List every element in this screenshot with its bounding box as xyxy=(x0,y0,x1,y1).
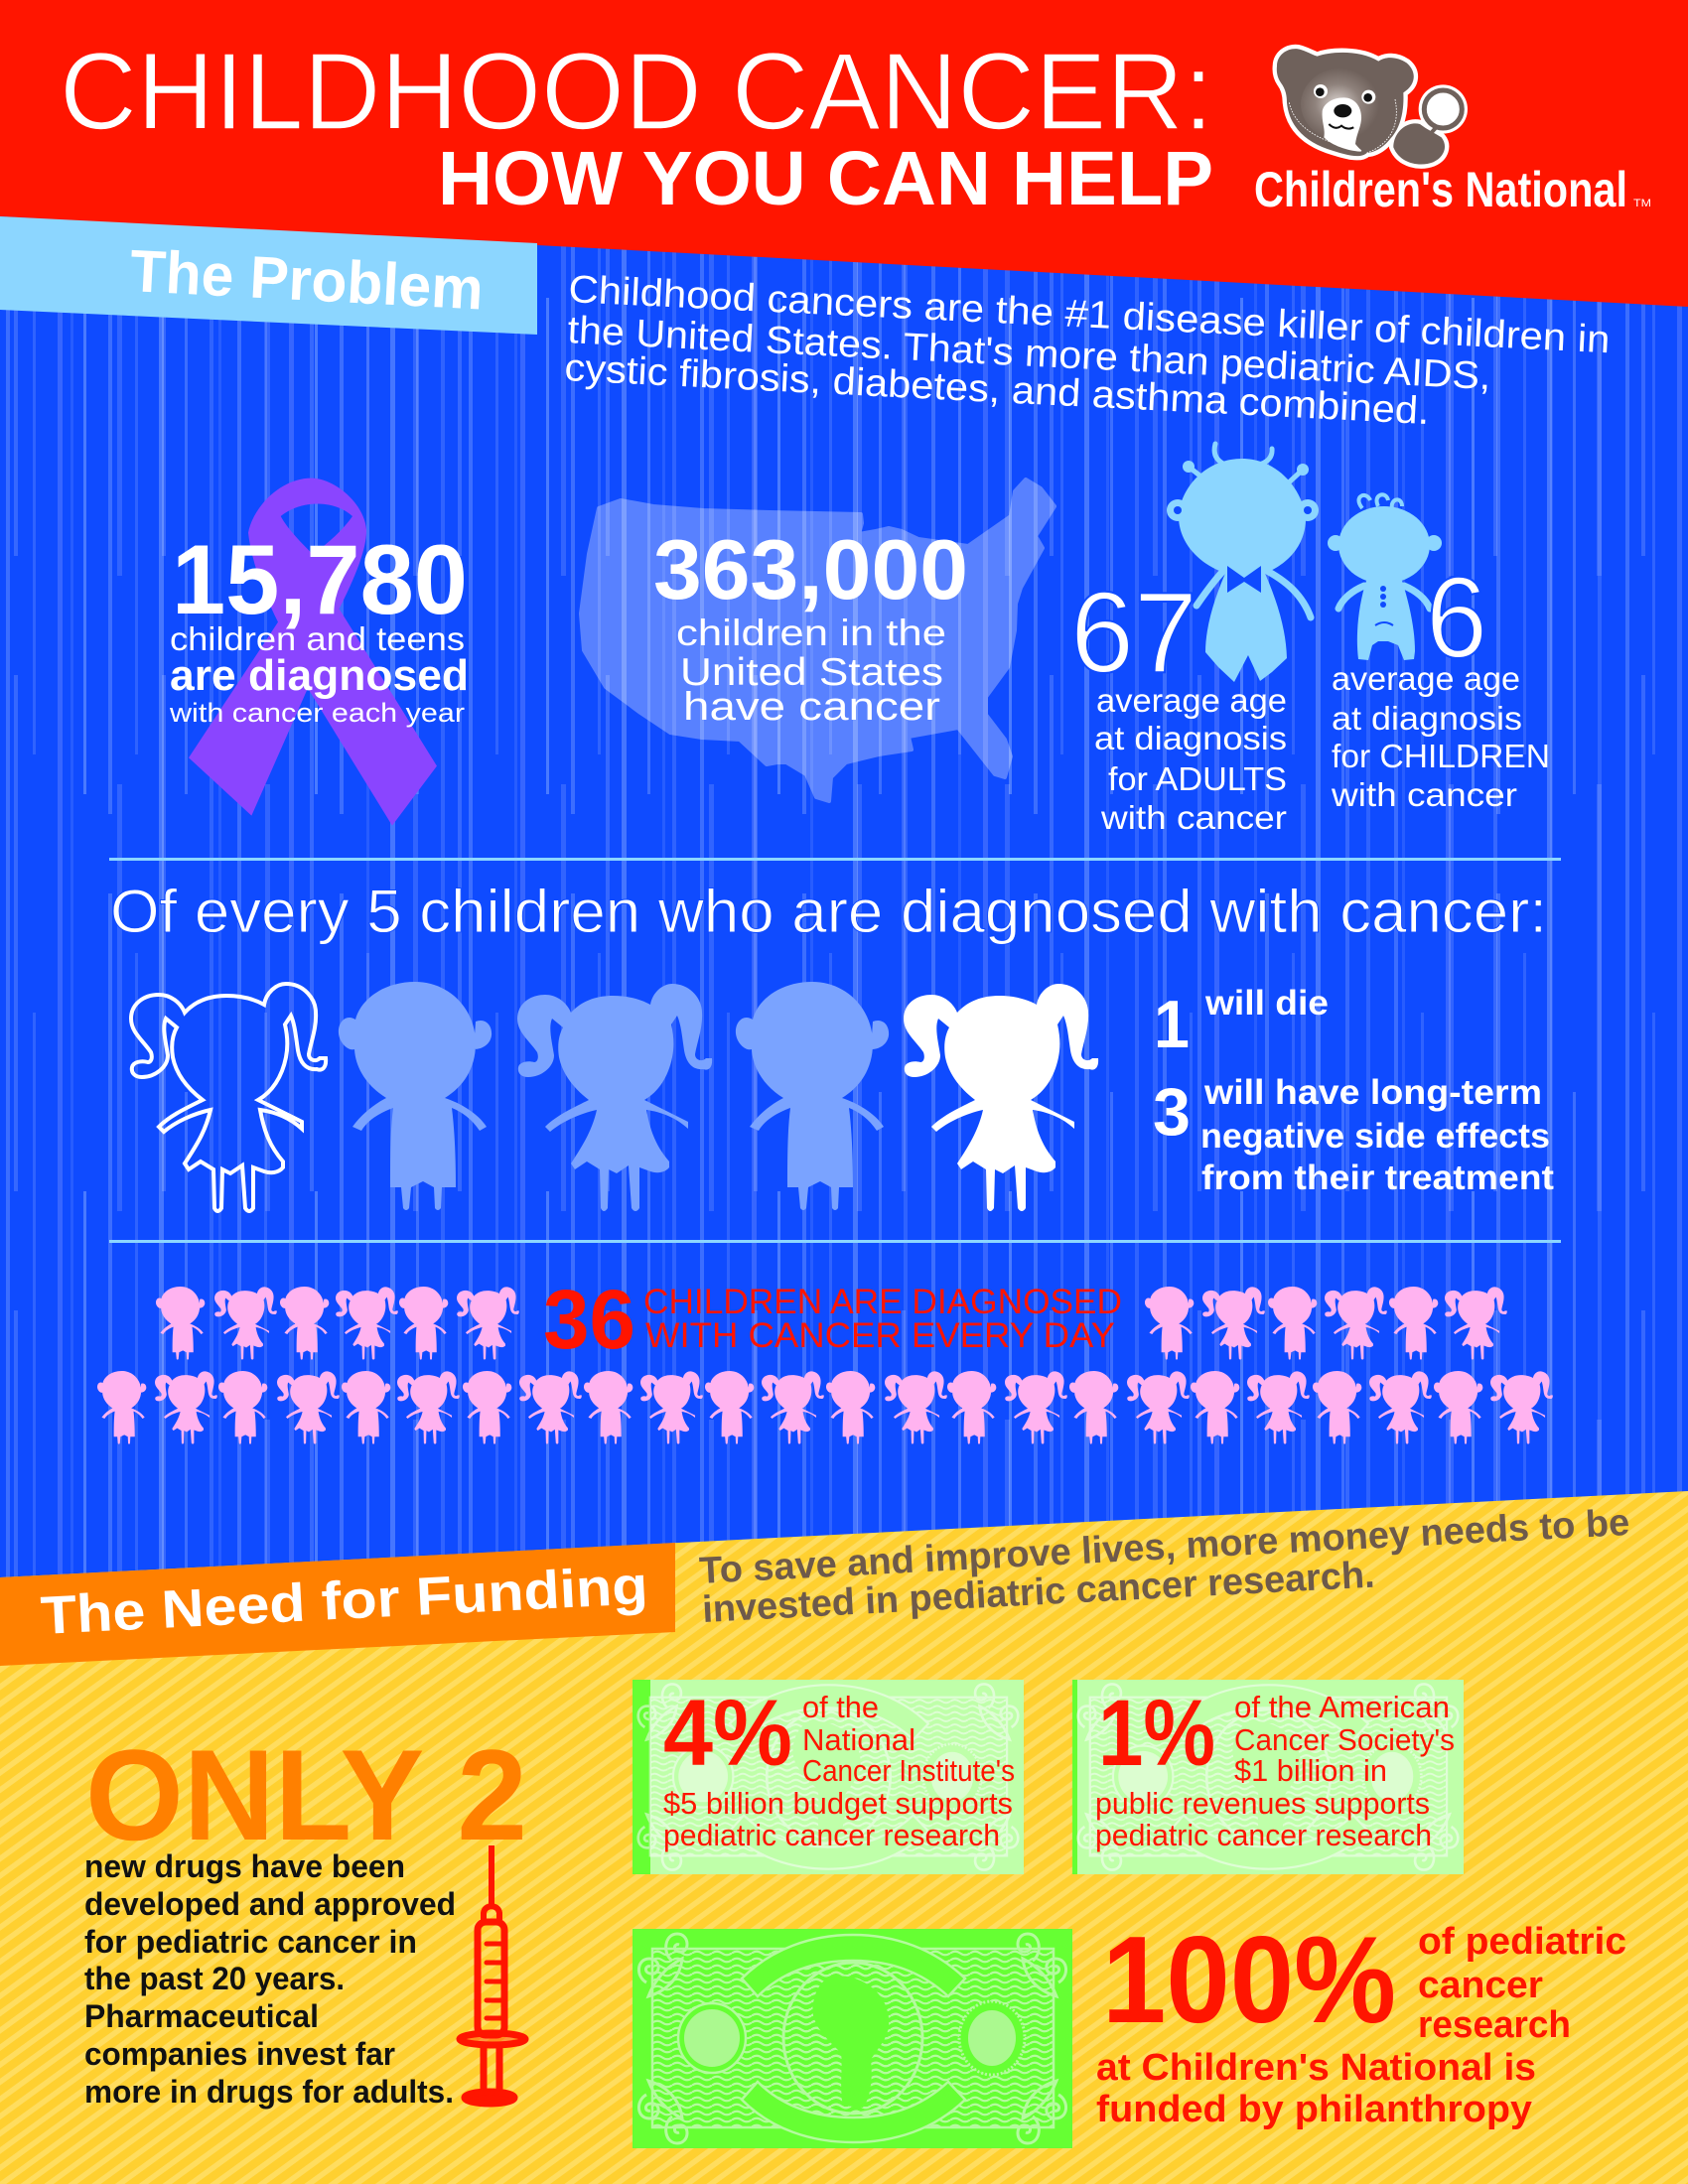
icon: purple awareness ribbon xyxy=(189,478,437,826)
intro paragraph: Childhood cancers are the #1 disease killer of children in xyxy=(568,268,1611,361)
section tab: The Need for Funding xyxy=(0,1543,675,1666)
text: funded by philanthropy: of pediatric xyxy=(1418,1921,1626,1963)
text: funded by philanthropy: funded by philanthropy xyxy=(1096,2089,1532,2130)
title line 2: HOW YOU CAN HELP xyxy=(438,136,1213,221)
text: National Cancer Institute: pediatric cancer research xyxy=(663,1818,1000,1852)
stat: 3 will have side effects xyxy=(1153,1073,1554,1197)
label: children average age: for CHILDREN xyxy=(1332,738,1550,774)
stat: age 6: 6 xyxy=(1426,553,1487,682)
text: new drugs: new drugs have been xyxy=(84,1848,405,1884)
text: American Cancer Society: Cancer Society's xyxy=(1234,1722,1455,1757)
pictogram: children row 2 xyxy=(97,1371,1553,1444)
icon: syringe xyxy=(460,1845,525,2104)
intro paragraph xyxy=(564,268,1611,433)
icon: large money bill xyxy=(633,1929,1072,2148)
intro paragraph: cystic fibrosis, diabetes, and asthma combined. xyxy=(564,346,1431,433)
text: funded by philanthropy xyxy=(1096,1921,1626,2130)
funding intro text: To save and improve lives, more money needs to be xyxy=(698,1502,1630,1592)
header: red banner xyxy=(0,0,1688,307)
stat: 1 percent: 1% xyxy=(1098,1681,1215,1786)
background: yellow funding section xyxy=(0,1491,1688,2184)
text: new drugs: Pharmaceutical xyxy=(84,1998,319,2034)
section heading: The Problem: The Problem xyxy=(128,237,485,323)
stat: 1 will die: will die xyxy=(1204,984,1329,1023)
label: adults average age: for ADULTS xyxy=(1108,760,1287,797)
stat: 15,780 children: children and teens xyxy=(170,620,465,657)
intro paragraph: the United States. That's more than pediatric AIDS, xyxy=(567,309,1492,398)
section heading: The Need for Funding: The Need for Funding xyxy=(40,1556,649,1646)
text: American Cancer Society: pediatric cancer research xyxy=(1095,1818,1432,1852)
stat: 4 percent: 4% xyxy=(663,1681,792,1786)
text: National Cancer Institute: $5 billion budget supports xyxy=(663,1786,1013,1821)
text: American Cancer Society: $1 billion in xyxy=(1234,1753,1387,1788)
label: adults average age xyxy=(1094,682,1287,836)
text: National Cancer Institute: of the xyxy=(802,1690,879,1724)
icon: child figure xyxy=(1328,494,1442,660)
stat: 15,780 children: are diagnosed xyxy=(170,651,469,700)
icon: adult figure xyxy=(1167,444,1319,682)
text: funded by philanthropy: cancer xyxy=(1418,1965,1543,2006)
text: funded by philanthropy: research xyxy=(1418,2004,1571,2046)
stat: 15,780 children xyxy=(169,524,469,728)
text: American Cancer Society xyxy=(1095,1690,1455,1852)
text: National Cancer Institute: Cancer Institute's xyxy=(802,1753,1015,1788)
stat: 3 will have side effects: 3 xyxy=(1153,1074,1191,1150)
title line 1: CHILDHOOD CANCER: xyxy=(60,31,1213,153)
text: National Cancer Institute xyxy=(663,1690,1015,1852)
stat: 1 will die: 1 xyxy=(1154,987,1190,1062)
stat: only 2: ONLY 2 xyxy=(85,1722,527,1867)
stat: 363,000 children: United States xyxy=(680,651,943,694)
text: new drugs: companies invest far xyxy=(84,2036,395,2072)
text: new drugs: developed and approved xyxy=(84,1886,456,1922)
callout: 36 children diagnosed every day xyxy=(543,1273,1122,1366)
text: new drugs: for pediatric cancer in xyxy=(84,1924,417,1960)
label: adults average age: average age xyxy=(1096,682,1287,719)
logo: Children's National bear xyxy=(1277,49,1468,164)
callout: 36 children diagnosed every day: CHILDREN ARE DIAGNOSED xyxy=(643,1283,1122,1321)
label: adults average age: with cancer xyxy=(1100,799,1287,836)
callout: 36 children diagnosed every day: WITH CANCER EVERY DAY xyxy=(645,1316,1115,1355)
text: new drugs: more in drugs for adults. xyxy=(84,2074,454,2110)
stat: 363,000 children: children in the xyxy=(676,613,946,653)
text: American Cancer Society: of the American xyxy=(1234,1690,1450,1724)
logo trademark: TM xyxy=(1633,198,1651,209)
pictogram: children row 1 right xyxy=(1145,1287,1507,1360)
label: children average age: average age xyxy=(1332,660,1520,697)
stat: 3 will have side effects: negative side effects xyxy=(1200,1117,1550,1156)
icon row: five children xyxy=(131,982,1098,1211)
pictogram: children row 1 left xyxy=(156,1287,519,1360)
stat: 15,780 children: 15,780 xyxy=(172,524,468,634)
text: American Cancer Society: public revenues supports xyxy=(1095,1786,1430,1821)
label: adults average age: at diagnosis xyxy=(1094,720,1287,756)
text: funded by philanthropy: at Children's National is xyxy=(1096,2047,1536,2089)
label: children average age xyxy=(1331,660,1550,813)
stat: age 67: 67 xyxy=(1070,568,1197,697)
heading: of every 5 children: Of every 5 children who are diagnosed with cancer: xyxy=(110,878,1547,945)
panel: 1 percent money bill xyxy=(1072,1680,1464,1874)
stat: 363,000 children: have cancer xyxy=(683,685,940,729)
label: children average age: at diagnosis xyxy=(1332,700,1522,737)
text: new drugs xyxy=(84,1848,456,2110)
callout: 36 children diagnosed every day: 36 xyxy=(543,1273,635,1366)
panel: 4 percent money bill xyxy=(633,1680,1024,1874)
stat: 363,000 children: 363,000 xyxy=(653,523,968,617)
funding intro text xyxy=(698,1502,1630,1631)
section tab: The Problem xyxy=(0,216,537,335)
label: children average age: with cancer xyxy=(1331,776,1517,813)
stat: 100 percent: 100% xyxy=(1102,1912,1396,2049)
text: National Cancer Institute: National xyxy=(802,1722,915,1757)
stat: 15,780 children: with cancer each year xyxy=(169,698,465,728)
icon: United States map xyxy=(581,479,1055,801)
stat: 3 will have side effects: from their treatment xyxy=(1201,1159,1554,1197)
stat: 1 will die xyxy=(1154,984,1329,1062)
stat: 3 will have side effects: will have long-term xyxy=(1203,1073,1542,1112)
funding intro text: invested in pediatric cancer research. xyxy=(701,1555,1376,1631)
text: new drugs: the past 20 years. xyxy=(84,1961,345,1996)
stat: 363,000 children xyxy=(653,523,968,729)
